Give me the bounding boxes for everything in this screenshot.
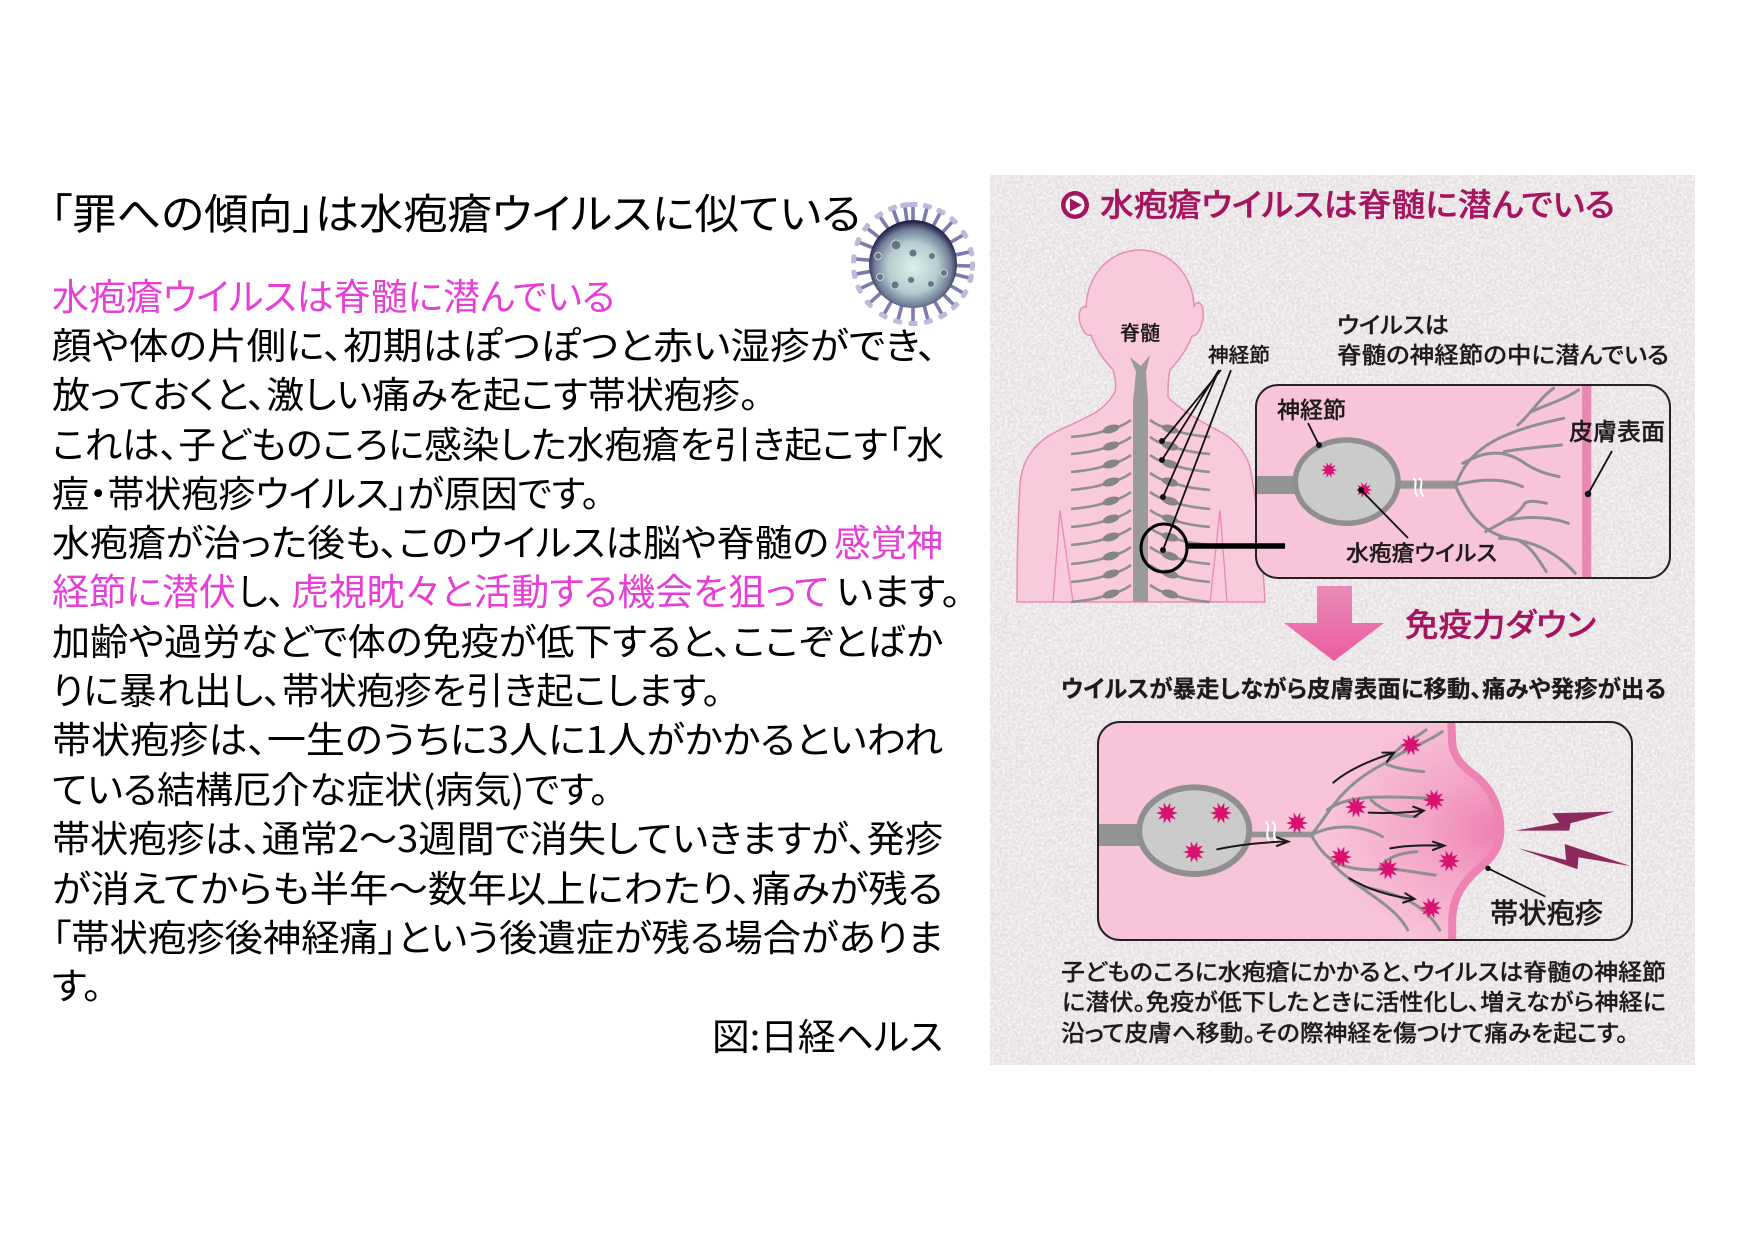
inset: dormant virus in ganglion bbox=[1256, 385, 1670, 578]
inset labels with leaders: 皮膚表面 bbox=[1569, 412, 1665, 447]
heading: immunity down: 免疫力ダウン bbox=[1405, 600, 1596, 646]
label: spinal cord: 脊髄 bbox=[1120, 317, 1160, 346]
body text block: 加齢や過労などで体の免疫が低下すると、ここぞとばか bbox=[52, 612, 943, 666]
body text block: 放っておくと、激しい痛みを起こす帯状疱疹。 bbox=[52, 365, 759, 419]
caption: 沿って皮膚へ移動。その際神経を傷つけて痛みを起こす。 bbox=[1061, 1014, 1628, 1048]
body text block: 痘・帯状疱疹ウイルス」が原因です。 bbox=[52, 464, 600, 518]
body text block: す。 bbox=[52, 956, 102, 1010]
caption bbox=[1061, 953, 1666, 1048]
inset labels with leaders: 水疱瘡ウイルス bbox=[1346, 536, 1497, 568]
figure: human back with spine bbox=[1017, 250, 1265, 602]
page title: 「罪への傾向」は水疱瘡ウイルスに似ている bbox=[50, 181, 861, 242]
label: shingles: 帯状疱疹 bbox=[1490, 892, 1603, 932]
caption: 子どものころに水疱瘡にかかると、ウイルスは脊髄の神経節 bbox=[1061, 953, 1666, 987]
icon: virus bbox=[851, 202, 975, 326]
text: virus moves to skin: ウイルスが暴走しながら皮膚表面に移動、痛みや発疹が出る bbox=[1061, 670, 1666, 704]
body text block: 「帯状疱疹後神経痛」という後遺症が残る場合がありま bbox=[52, 908, 943, 962]
body text block: 経節に潜伏 bbox=[52, 562, 236, 616]
body text block bbox=[52, 316, 961, 1010]
text: virus hides in ganglion: 脊髄の神経節の中に潜んでいる bbox=[1337, 336, 1669, 370]
label: ganglion with leader lines bbox=[1159, 339, 1270, 553]
diagram: active virus moving to skin bbox=[1098, 722, 1632, 940]
body text block: りに暴れ出し、帯状疱疹を引き起こします。 bbox=[52, 661, 721, 715]
text: virus hides in ganglion: ウイルスは bbox=[1337, 306, 1449, 340]
label: ganglion with leader lines: 神経節 bbox=[1208, 339, 1270, 368]
text: virus hides in ganglion bbox=[1337, 306, 1669, 370]
icon: play bullet bbox=[1061, 191, 1089, 219]
arrow: down bbox=[1284, 586, 1384, 661]
body text block: これは、子どものころに感染した水疱瘡を引き起こす「水 bbox=[52, 415, 944, 469]
body text block: 虎視眈々と活動する機会を狙って bbox=[291, 562, 829, 616]
callout: magnifier circle and connector bbox=[1141, 524, 1285, 572]
body text block: し、 bbox=[238, 562, 285, 616]
body text block: 顔や体の片側に、初期はぽつぽつと赤い湿疹ができ、 bbox=[52, 316, 937, 370]
body text block: 感覚神 bbox=[834, 513, 943, 567]
body text block: 帯状疱疹は、通常2〜3週間で消失していきますが、発疹 bbox=[52, 809, 943, 863]
body text block: 水疱瘡が治った後も、このウイルスは脳や脊髄の bbox=[52, 513, 829, 567]
caption: に潜伏。免疫が低下したときに活性化し、増えながら神経に bbox=[1062, 983, 1666, 1017]
panel heading: 水疱瘡ウイルスは脊髄に潜んでいる bbox=[1100, 180, 1615, 226]
source credit: 図:日経ヘルス bbox=[712, 1007, 943, 1061]
body text block: が消えてからも半年〜数年以上にわたり、痛みが残る bbox=[52, 859, 943, 913]
inset labels with leaders bbox=[1277, 391, 1665, 568]
inset labels with leaders: 神経節 bbox=[1277, 391, 1346, 425]
body text block: います。 bbox=[836, 562, 961, 616]
heading: pink subtitle: 水疱瘡ウイルスは脊髄に潜んでいる bbox=[52, 267, 615, 321]
body text block: 帯状疱疹は、一生のうちに3人に1人がかかるといわれ bbox=[52, 710, 943, 764]
panel: shingles diagram bbox=[990, 175, 1695, 1065]
body text block: ている結構厄介な症状(病気)です。 bbox=[52, 760, 609, 814]
